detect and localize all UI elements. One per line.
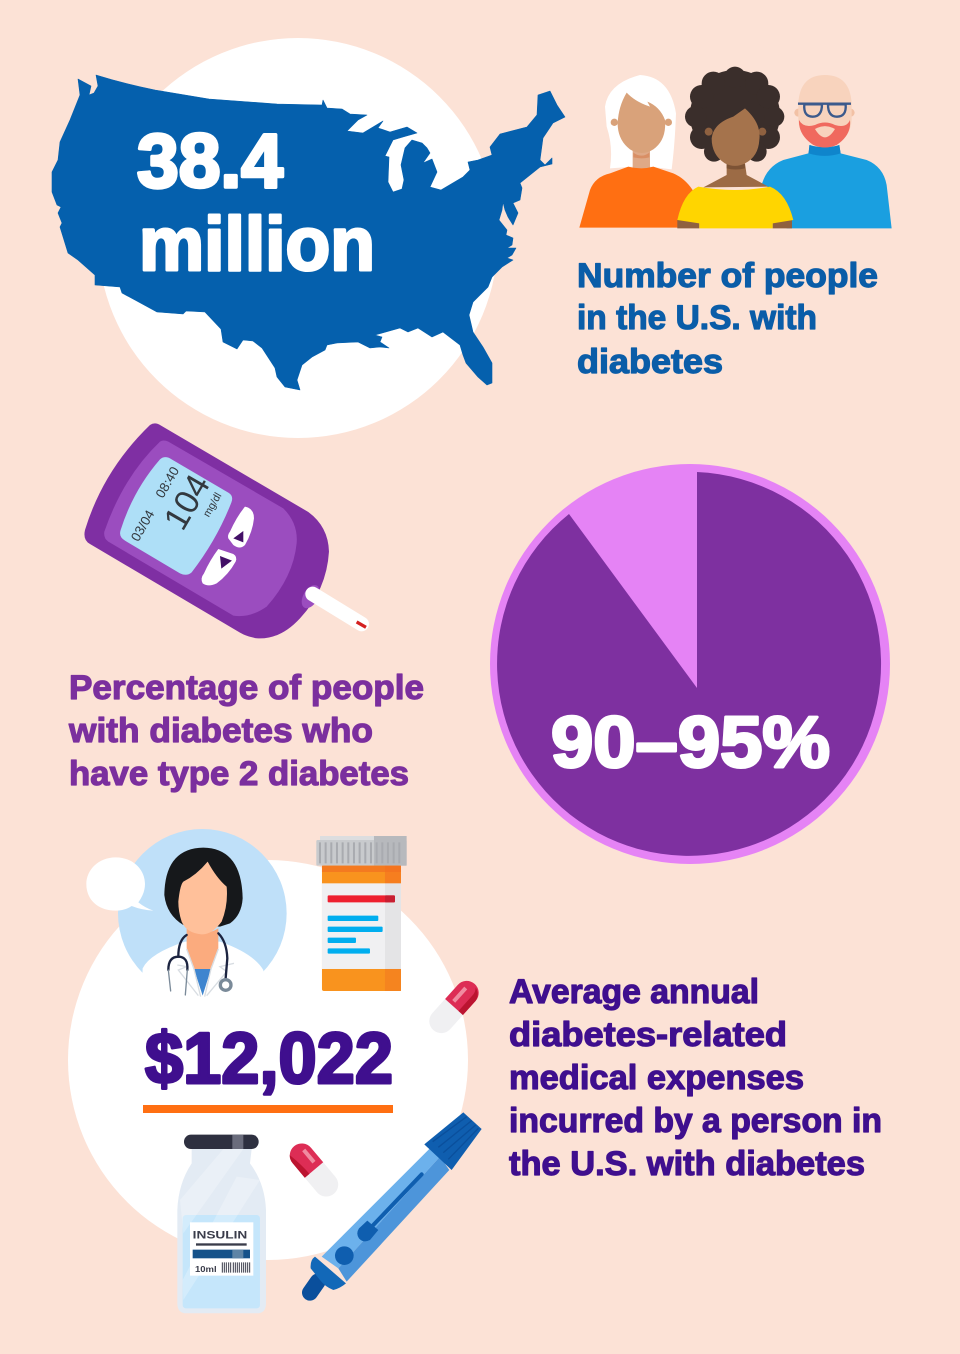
figure: 38.4 million: million (139, 202, 375, 287)
vial label: 10ml (195, 1264, 217, 1274)
icon: capsule upper (424, 976, 484, 1038)
orange rule (143, 1105, 393, 1113)
icon: capsule lower (285, 1139, 343, 1201)
icon: glucose meter (84, 423, 366, 638)
meter screen: mg/dl (201, 491, 224, 519)
text: medical expenses caption: Average annual (509, 973, 759, 1011)
text: number of people caption: in the U.S. with (577, 299, 817, 337)
panel: US diabetes count (52, 38, 565, 438)
meter screen: 104 (157, 468, 218, 536)
text: medical expenses caption: incurred by a person in (509, 1102, 882, 1140)
person: woman with afro (677, 67, 793, 228)
text: number of people caption: Number of people (577, 257, 878, 295)
meter buttons (202, 507, 254, 585)
meter screen (120, 457, 232, 575)
text: percentage caption: with diabetes who (68, 712, 373, 750)
icon: insulin vial (177, 1135, 266, 1313)
meter screen: 08:40 (152, 464, 182, 501)
figure: 38.4 million: 38.4 (137, 119, 283, 204)
vial label: INSULIN (193, 1229, 247, 1241)
figure: 38.4 million (137, 119, 375, 287)
text: percentage caption: have type 2 diabetes (69, 755, 409, 793)
person: woman with white hair (579, 75, 693, 228)
map of the United States (52, 75, 565, 390)
speech bubble (86, 857, 153, 911)
text: medical expenses caption: medical expenses (509, 1059, 804, 1097)
icon: insulin pen (310, 1112, 482, 1293)
text: medical expenses caption: diabetes-related (509, 1016, 787, 1054)
test strip (298, 582, 366, 627)
text: percentage caption (68, 669, 424, 793)
pie chart: 90–95% type 2 (490, 464, 890, 864)
text: number of people caption: diabetes (577, 343, 723, 381)
icon: doctor (86, 829, 287, 999)
person: man with glasses and beard (762, 75, 892, 228)
meter screen: 03/04 (128, 507, 158, 544)
vial label (190, 1222, 253, 1276)
panel: medical expenses (68, 829, 484, 1313)
icon: three people (579, 67, 892, 228)
text: number of people caption (577, 257, 878, 381)
icon: prescription bottle (316, 836, 407, 991)
white circle behind expenses (68, 860, 468, 1260)
white circle behind map (98, 38, 498, 438)
text: percentage caption: Percentage of people (69, 669, 424, 707)
figure: $12,022: $12,022 (145, 1019, 393, 1099)
text: medical expenses caption (509, 973, 882, 1183)
text: medical expenses caption: the U.S. with diabetes (509, 1145, 865, 1183)
figure: 90–95%: 90–95% (551, 703, 830, 783)
